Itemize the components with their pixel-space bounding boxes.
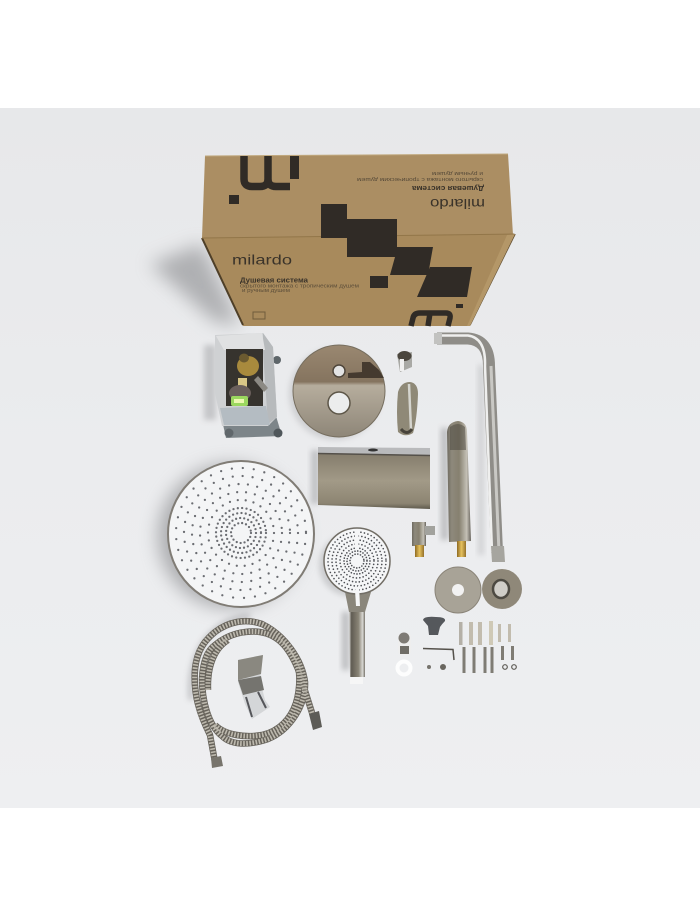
box text, upside-down on flap: и ручным душем bbox=[431, 170, 483, 176]
rain shower head bbox=[168, 461, 314, 607]
box logo mark, front face bbox=[411, 304, 463, 326]
box top flap bbox=[202, 154, 513, 238]
box edges bbox=[202, 238, 243, 325]
box text, upside-down on flap: milardo bbox=[430, 196, 485, 212]
lever handle bbox=[397, 382, 418, 435]
green level bbox=[231, 396, 248, 406]
box text, upside-down on flap: скрытого монтажа с тропическим душем bbox=[356, 176, 483, 182]
photo background bbox=[0, 108, 700, 808]
clear housing bbox=[215, 333, 277, 426]
box text, upside-down on flap: Душевая система bbox=[412, 184, 484, 191]
dark diverter handle bbox=[423, 617, 445, 635]
valve box bbox=[215, 333, 282, 438]
brass valve body bbox=[237, 356, 259, 376]
long slide handle bbox=[447, 421, 471, 557]
wall plugs bbox=[459, 621, 511, 645]
flexible hose bbox=[195, 621, 322, 768]
box front face bbox=[202, 234, 515, 326]
hose fittings bbox=[211, 756, 223, 768]
small grub screws bbox=[427, 664, 446, 670]
box text, front: скрытого монтажа с тропическим душем bbox=[240, 284, 360, 290]
wall bracket bbox=[238, 655, 270, 719]
small box icon bbox=[253, 312, 265, 319]
ball joint nut and washer bbox=[398, 632, 411, 674]
box text, front: milardo bbox=[232, 252, 292, 268]
box text, front bbox=[232, 252, 360, 294]
mounting flange bbox=[222, 416, 282, 438]
chrome knob bbox=[397, 351, 412, 372]
shower arm pipe bbox=[434, 333, 505, 562]
box text, upside-down on flap bbox=[356, 170, 485, 212]
dark interior bbox=[226, 349, 263, 406]
cardboard box bbox=[202, 154, 515, 326]
screws bbox=[462, 646, 514, 673]
box text, front: и ручным душем bbox=[242, 288, 291, 294]
handle bbox=[349, 607, 365, 677]
cover plate disc bbox=[293, 345, 385, 437]
spray face bbox=[324, 528, 390, 594]
waterfall spout bbox=[318, 447, 430, 509]
soft shadows bbox=[150, 244, 484, 700]
hand shower bbox=[324, 528, 390, 684]
box text, front: Душевая система bbox=[240, 278, 308, 284]
hex key bbox=[423, 648, 454, 660]
elbow connector bbox=[412, 522, 435, 557]
box logo mark, top flap bbox=[229, 156, 299, 204]
flat flange plate bbox=[435, 567, 481, 613]
escutcheon ring bbox=[482, 569, 522, 609]
box pattern: dark squares bbox=[321, 204, 472, 297]
small rubber rings bbox=[503, 665, 516, 669]
